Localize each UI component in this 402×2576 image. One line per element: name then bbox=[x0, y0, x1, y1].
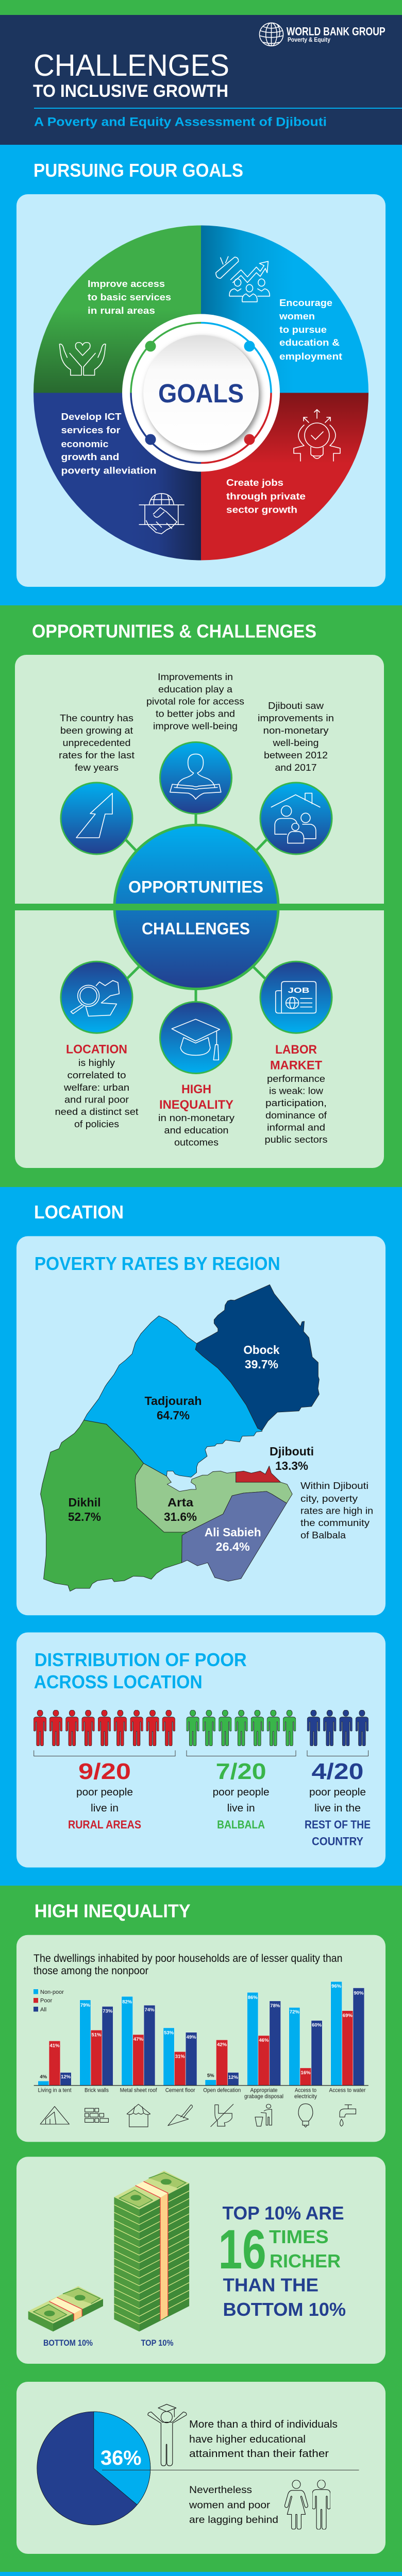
note: Balbala: rates are high in bbox=[300, 1505, 373, 1516]
map label: Tadjourah: Tadjourah bbox=[144, 1394, 202, 1408]
icon: light bulb bbox=[298, 2104, 313, 2127]
note: Balbala: of Balbala bbox=[300, 1530, 346, 1540]
text: attainment: have higher educational bbox=[189, 2434, 306, 2445]
category labels: Appropriate bbox=[250, 2088, 277, 2094]
text: education bbox=[146, 672, 244, 732]
panel heading: DISTRIBUTION OF POOR bbox=[35, 1649, 247, 1670]
text: labor market challenge: informal and bbox=[267, 1122, 325, 1132]
header band bbox=[0, 0, 402, 145]
icon: graduation cap bbox=[160, 1002, 232, 1074]
logo: World Bank Group bbox=[259, 23, 386, 46]
text: location challenge: correlated to bbox=[67, 1070, 126, 1080]
text: growth: few years bbox=[75, 762, 119, 773]
money stack: top 10% bbox=[114, 2171, 189, 2332]
text: well-being: between 2012 bbox=[264, 750, 328, 760]
pie chart: 36%: 36% bbox=[100, 2447, 141, 2469]
bar value labels: 4% bbox=[40, 2074, 47, 2080]
stat: 4/20 rest of the country: COUNTRY bbox=[312, 1835, 363, 1848]
text: well-being: Djibouti saw bbox=[268, 701, 324, 711]
text: labor market challenge: public sectors bbox=[265, 1134, 328, 1145]
category labels: electricity bbox=[294, 2094, 317, 2100]
bar value labels: 78% bbox=[270, 2003, 280, 2009]
icon: bulb with hands bbox=[294, 410, 340, 461]
map label: Tadjourah: 64.7% bbox=[157, 1409, 190, 1422]
map label: Ali Sabieh: 26.4% bbox=[216, 1540, 250, 1553]
text: attainment bbox=[189, 2419, 338, 2460]
text: well-being: non-monetary bbox=[263, 725, 329, 736]
logo: World Bank Group: Poverty & Equity bbox=[288, 36, 330, 43]
note: Balbala: the community bbox=[300, 1518, 370, 1528]
map of regions bbox=[41, 1285, 319, 1591]
heading: LOCATION bbox=[34, 1201, 124, 1223]
text: education: pivotal role for access bbox=[146, 697, 244, 707]
chart legend: Non-poor bbox=[40, 1989, 64, 1995]
map label: Dikhil bbox=[68, 1496, 101, 1523]
panel: dwellings chart bbox=[16, 1935, 386, 2142]
title: TO INCLUSIVE GROWTH bbox=[33, 81, 228, 101]
text: location challenge: welfare: urban bbox=[63, 1082, 129, 1093]
text: education: education play a bbox=[158, 684, 233, 694]
callout: 16 times richer: TOP 10% ARE bbox=[223, 2202, 344, 2224]
icon: roofed house bbox=[127, 2104, 150, 2127]
bar value labels: 12% bbox=[61, 2074, 71, 2080]
bar value labels: 46% bbox=[259, 2038, 269, 2043]
stat: 4/20 rest of the country: poor people bbox=[309, 1787, 366, 1798]
goal text: rural access bbox=[88, 279, 171, 316]
text: labor market challenge: dominance of bbox=[265, 1110, 327, 1121]
text: well-being: improvements in bbox=[258, 713, 334, 723]
bar value labels: 86% bbox=[248, 1995, 258, 2001]
callout: 16 times richer: TIMES bbox=[269, 2226, 329, 2247]
goal text: women: employment bbox=[279, 351, 342, 362]
text: well-being bbox=[258, 701, 334, 773]
chart legend: Poor bbox=[40, 1998, 53, 2004]
text: location challenge bbox=[55, 1043, 138, 1129]
section: high inequality bbox=[0, 1886, 402, 2572]
chart intro text: The dwellings inhabited by poor households are of lesser quality than bbox=[34, 1953, 342, 1964]
panel: top 10% versus bottom 10% bbox=[16, 2157, 386, 2364]
category labels bbox=[38, 2088, 366, 2100]
goals wheel bbox=[34, 226, 368, 561]
stat: 7/20 Balbala: BALBALA bbox=[217, 1818, 265, 1831]
text: growth: The country has bbox=[60, 713, 133, 723]
icon: person with trash bin bbox=[255, 2104, 272, 2126]
chart legend bbox=[34, 1989, 64, 2013]
goal text: women: to pursue bbox=[279, 325, 327, 335]
text: well-being: well-being bbox=[272, 738, 319, 748]
goal text: jobs bbox=[226, 478, 306, 515]
text: labor market challenge: participation, bbox=[265, 1098, 327, 1108]
note: Balbala: Within Djibouti bbox=[300, 1481, 368, 1491]
heading: PURSUING FOUR GOALS bbox=[34, 160, 243, 181]
goal text: jobs: sector growth bbox=[226, 505, 297, 515]
category labels: Open defecation bbox=[203, 2088, 241, 2094]
map label: Djibouti: Djibouti bbox=[270, 1445, 314, 1458]
bar value labels: 69% bbox=[343, 2013, 353, 2019]
bar value labels bbox=[40, 1984, 364, 2080]
text: location challenge: of policies bbox=[74, 1119, 119, 1129]
map label: Djibouti bbox=[270, 1445, 314, 1472]
panel heading bbox=[34, 1649, 247, 1692]
bar value labels: 60% bbox=[312, 2023, 322, 2028]
title bbox=[33, 48, 229, 101]
bar value labels: 51% bbox=[91, 2032, 102, 2038]
text: attainment: More than a third of individuals bbox=[189, 2419, 338, 2430]
map label: Arta: Arta bbox=[167, 1496, 193, 1509]
goal text: rural access: Improve access bbox=[88, 279, 165, 289]
pictogram: rest of country poor bbox=[307, 1710, 368, 1746]
stat: 9/20 rural areas: poor people bbox=[76, 1787, 133, 1798]
stat: 7/20 Balbala bbox=[213, 1759, 270, 1831]
bar value labels: 96% bbox=[331, 1984, 342, 1989]
icon: reader with book bbox=[160, 742, 232, 814]
bar value labels: 42% bbox=[217, 2042, 227, 2047]
map label: Dikhil: 52.7% bbox=[68, 1510, 101, 1523]
center goals badge bbox=[122, 314, 280, 472]
icon: globe and handshake bbox=[139, 494, 184, 534]
icon: no toilet bbox=[211, 2104, 233, 2127]
text: labor market challenge: MARKET bbox=[270, 1058, 322, 1073]
heading: OPPORTUNITIES & CHALLENGES bbox=[32, 620, 316, 642]
note: Balbala: city, poverty bbox=[300, 1494, 358, 1504]
text: inequality challenge: in non-monetary bbox=[158, 1113, 234, 1123]
goal text: women bbox=[279, 298, 342, 362]
bar value labels: 79% bbox=[80, 2003, 90, 2008]
map label: Obock: 39.7% bbox=[245, 1358, 278, 1371]
bar value labels: 90% bbox=[354, 1991, 364, 1996]
panel heading: POVERTY RATES BY REGION bbox=[35, 1253, 280, 1274]
stat: 4/20 rest of the country: REST OF THE bbox=[305, 1818, 371, 1831]
icon: growth arrow bbox=[61, 783, 132, 854]
subtitle: A Poverty and Equity Assessment of Djibouti bbox=[34, 115, 327, 129]
bar value labels: 47% bbox=[133, 2037, 143, 2042]
icon: job newspaper bbox=[260, 961, 332, 1033]
icon: bricks bbox=[85, 2108, 108, 2122]
callout: 16 times richer bbox=[219, 2202, 346, 2320]
category labels: Access to bbox=[295, 2088, 316, 2094]
map label: Dikhil: Dikhil bbox=[68, 1496, 101, 1509]
callout: 16 times richer: BOTTOM 10% bbox=[223, 2299, 346, 2320]
goal text: women: education & bbox=[279, 337, 340, 348]
bar value labels: 53% bbox=[164, 2030, 174, 2036]
stack labels: TOP 10% bbox=[141, 2338, 173, 2348]
category labels: Living in a tent bbox=[38, 2088, 71, 2094]
category labels: Metal sheet roof bbox=[120, 2088, 157, 2094]
icon: family under a roof bbox=[260, 783, 332, 854]
heading: HIGH INEQUALITY bbox=[35, 1901, 191, 1922]
panel: poverty rates by region bbox=[16, 1236, 386, 1615]
goal text: rural access: to basic services bbox=[88, 292, 171, 302]
bar value labels: 5% bbox=[207, 2073, 214, 2078]
connectors bbox=[126, 814, 266, 1002]
pictogram: Balbala poor bbox=[187, 1710, 296, 1746]
goal text: ICT: poverty alleviation bbox=[61, 466, 157, 476]
goal text: ICT bbox=[61, 412, 157, 476]
text: labor market challenge: performance bbox=[267, 1074, 325, 1084]
callout: 16 times richer: RICHER bbox=[270, 2250, 341, 2272]
text: education: Improvements in bbox=[158, 672, 233, 682]
text: growth bbox=[59, 713, 135, 773]
section: labor market bbox=[0, 2572, 402, 2576]
icon: tent bbox=[40, 2107, 69, 2124]
stat: 7/20 Balbala: poor people bbox=[213, 1787, 270, 1798]
text: labor market challenge bbox=[265, 1043, 328, 1145]
text: growth: unprecedented bbox=[63, 738, 131, 748]
icon: job newspaper: JOB bbox=[288, 986, 310, 995]
icon: water tap bbox=[340, 2105, 356, 2126]
callout: 16 times richer: THAN THE bbox=[223, 2275, 319, 2296]
text: education: improve well-being bbox=[153, 721, 238, 732]
icon: graduate with raised arms bbox=[148, 2404, 187, 2466]
section: pursuing four goals bbox=[16, 160, 386, 587]
stat: 7/20 Balbala: 7/20 bbox=[216, 1759, 266, 1784]
map label: Obock bbox=[243, 1343, 280, 1371]
pie chart: 36% bbox=[37, 2412, 150, 2525]
bar chart bbox=[34, 1981, 368, 2127]
chart intro text: those among the nonpoor bbox=[34, 1965, 148, 1977]
stat: 9/20 rural areas bbox=[68, 1759, 141, 1831]
stat: 9/20 rural areas: RURAL AREAS bbox=[68, 1818, 141, 1831]
text: inequality challenge bbox=[158, 1082, 234, 1148]
text: well-being: and 2017 bbox=[275, 762, 316, 773]
money stack: bottom 10% bbox=[28, 2286, 103, 2332]
chart legend: All bbox=[40, 2007, 46, 2013]
center goals badge: GOALS bbox=[158, 379, 244, 408]
text: lagging behind: Nevertheless bbox=[189, 2485, 252, 2496]
panel heading: ACROSS LOCATION bbox=[34, 1671, 203, 1692]
panel: goals bbox=[16, 194, 386, 587]
panel: educational attainment bbox=[16, 2382, 386, 2554]
central circle: opportunities and challenges: CHALLENGES bbox=[142, 919, 250, 938]
section: location bbox=[16, 1201, 386, 1868]
callout: 16 times richer: 16 bbox=[219, 2218, 266, 2280]
bar value labels: 41% bbox=[49, 2043, 60, 2048]
text: lagging behind: are lagging behind bbox=[189, 2515, 278, 2526]
icon: map and magnifier bbox=[61, 961, 132, 1033]
title: CHALLENGES bbox=[34, 48, 229, 82]
bar value labels: 82% bbox=[122, 1999, 132, 2005]
map label: Arta: 31.6% bbox=[164, 1510, 197, 1523]
goal text: rural access: in rural areas bbox=[88, 306, 155, 316]
stat: 9/20 rural areas: live in bbox=[91, 1803, 119, 1814]
stat: 4/20 rest of the country: 4/20 bbox=[311, 1759, 364, 1784]
chart intro text bbox=[34, 1953, 342, 1977]
stack labels bbox=[43, 2338, 173, 2348]
text: labor market challenge: is weak: low bbox=[269, 1086, 324, 1096]
stat: 4/20 rest of the country: live in the bbox=[314, 1803, 361, 1814]
text: location challenge: is highly bbox=[78, 1058, 115, 1068]
goal text: ICT: economic bbox=[61, 439, 108, 449]
stat: 9/20 rural areas: 9/20 bbox=[78, 1759, 131, 1784]
goal text: women: women bbox=[279, 311, 315, 321]
stat: 7/20 Balbala: live in bbox=[227, 1803, 255, 1814]
icon: diploma, growth arrow and people bbox=[216, 257, 270, 302]
bar value labels: 49% bbox=[187, 2035, 196, 2040]
text: inequality challenge: HIGH bbox=[181, 1082, 211, 1096]
bar value labels: 73% bbox=[103, 2008, 113, 2014]
central circle: opportunities and challenges bbox=[15, 825, 384, 989]
text: lagging behind: women and poor bbox=[189, 2500, 271, 2511]
text: labor market challenge: LABOR bbox=[275, 1043, 317, 1057]
bar value labels: 16% bbox=[300, 2070, 311, 2076]
panel: opportunities bbox=[15, 655, 384, 904]
note: Balbala bbox=[300, 1481, 373, 1540]
map label: Ali Sabieh: Ali Sabieh bbox=[205, 1526, 261, 1539]
category labels: Brick walls bbox=[85, 2088, 109, 2094]
text: growth: been growing at bbox=[60, 725, 133, 736]
panel: distribution of poor bbox=[16, 1632, 386, 1868]
icon: woman and man outlines bbox=[284, 2480, 330, 2530]
stack labels: BOTTOM 10% bbox=[43, 2338, 93, 2348]
text: lagging behind bbox=[189, 2485, 278, 2526]
bar value labels: 72% bbox=[290, 2009, 299, 2015]
bar value labels: 74% bbox=[144, 2007, 155, 2013]
category icons bbox=[40, 2104, 356, 2127]
text: location challenge: and rural poor bbox=[64, 1094, 129, 1105]
category labels: Access to water bbox=[329, 2088, 366, 2094]
category labels: Cement floor bbox=[165, 2088, 195, 2094]
goal text: jobs: through private bbox=[226, 492, 306, 502]
goal text: ICT: services for bbox=[61, 425, 121, 435]
text: location challenge: LOCATION bbox=[66, 1043, 127, 1057]
icon: trowel bbox=[168, 2105, 192, 2126]
map label: Ali Sabieh bbox=[205, 1526, 261, 1553]
bar value labels: 31% bbox=[175, 2054, 185, 2060]
goal text: jobs: Create jobs bbox=[226, 478, 283, 488]
text: inequality challenge: and education bbox=[164, 1125, 229, 1136]
bar value labels: 12% bbox=[228, 2075, 238, 2080]
panel: challenges bbox=[15, 910, 384, 1168]
text: inequality challenge: INEQUALITY bbox=[159, 1098, 233, 1112]
text: growth: rates for the last bbox=[59, 750, 135, 760]
goal text: ICT: growth and bbox=[61, 452, 120, 462]
category labels: grabage disposal bbox=[244, 2094, 283, 2100]
section: opportunities and challenges bbox=[0, 605, 402, 1187]
central circle: opportunities and challenges: OPPORTUNITIES bbox=[128, 877, 263, 896]
map label: Djibouti: 13.3% bbox=[275, 1459, 308, 1472]
stat: 4/20 rest of the country bbox=[305, 1759, 371, 1848]
text: education: to better jobs and bbox=[156, 709, 235, 719]
text: location challenge: need a distinct set bbox=[55, 1107, 138, 1117]
text: attainment: attainment than their father bbox=[189, 2448, 329, 2460]
goal text: women: Encourage bbox=[279, 298, 332, 308]
pictogram: rural poor bbox=[34, 1710, 175, 1746]
goal text: ICT: Develop ICT bbox=[61, 412, 122, 422]
map label: Obock: Obock bbox=[243, 1343, 280, 1357]
icon: hands and heart bbox=[59, 343, 106, 375]
map label: Tadjourah bbox=[144, 1394, 202, 1422]
text: inequality challenge: outcomes bbox=[174, 1138, 219, 1148]
map label: Arta bbox=[164, 1496, 197, 1523]
